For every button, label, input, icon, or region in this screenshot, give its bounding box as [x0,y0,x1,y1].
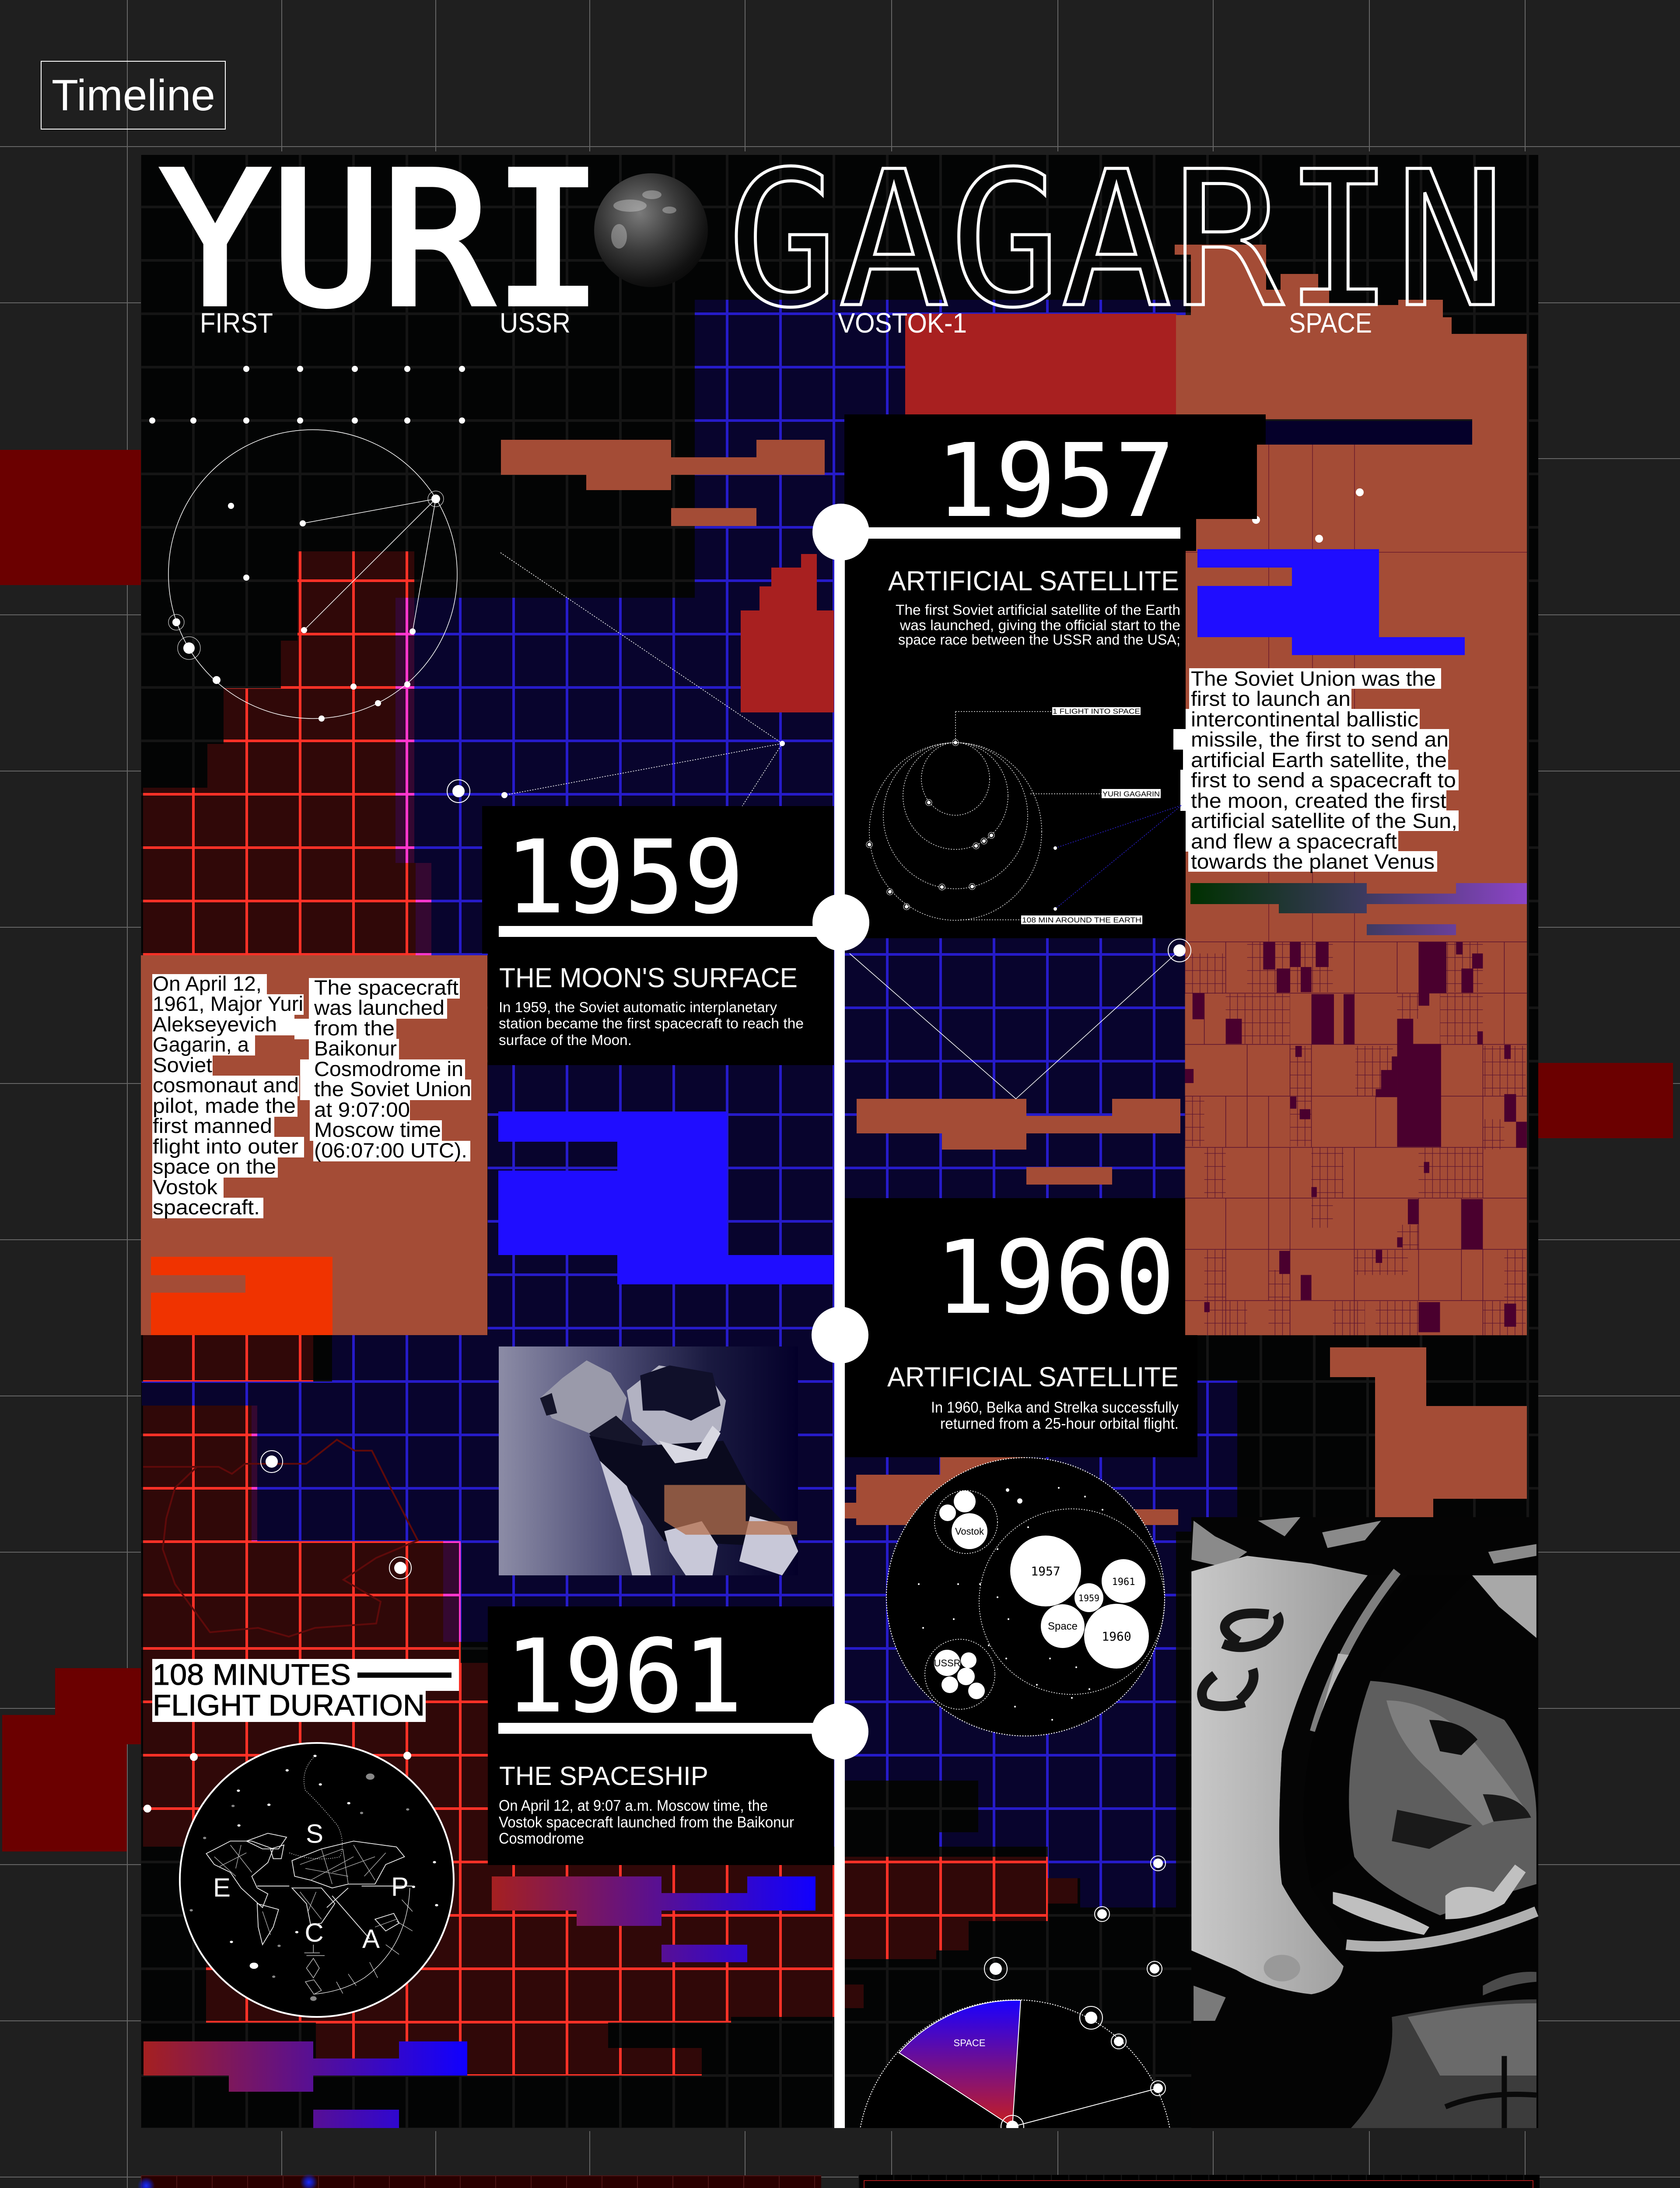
earth circle map: E [213,1873,231,1902]
panel: 1960 black block [844,1198,1197,1457]
story text left: flight into outer [153,1135,298,1158]
story text right: the Soviet Union [314,1077,471,1101]
connecting lines [500,553,1180,1099]
title labels [200,307,1372,339]
panel: path to the stars [858,2175,1540,2188]
callout: flight duration: FLIGHT DURATION [153,1689,425,1722]
treemap [1185,942,1527,1335]
brown block lower right [1330,1347,1527,1517]
timeline spine [834,526,845,2128]
story text left: cosmonaut and [153,1073,299,1097]
story text left: Vostok [153,1175,218,1199]
story text left: 1961, Major Yuri [153,992,303,1015]
callout: flight duration: 108 MINUTES [153,1658,351,1691]
blue stepped block [498,1112,834,1284]
story text right: (06:07:00 UTC). [314,1139,467,1162]
orange block [151,1257,332,1335]
heading and body 1957: The first Soviet artificial satellite of the Earth [896,602,1180,618]
heading and body 1959: surface of the Moon. [499,1032,632,1048]
blue glows [137,2174,794,2188]
dark red stepped block [741,554,834,712]
story text right: The spacecraft [314,976,458,999]
heading and body 1959: In 1959, the Soviet automatic interplanetary [499,999,777,1015]
planet icon [594,173,708,287]
panel: 1961 black block [488,1606,834,1865]
earth circle map: P [391,1872,409,1901]
heading and body 1959: station became the first spacecraft to reach the [499,1015,804,1031]
title FIRST FLIGHT [153,2177,809,2188]
heading and body 1960: ARTIFICIAL SATELLITE [887,1362,1179,1392]
story text left: space on the [153,1155,276,1178]
bubble chart: 1960 [1102,1629,1131,1644]
brown stepped block upper left [501,440,825,526]
heading and body 1957: was launched, giving the official start to the [900,617,1180,633]
story text left: first manned [153,1114,272,1137]
continents [206,1833,413,1945]
story text right: Baikonur [314,1037,397,1060]
panel: main timeline poster [141,131,1538,2188]
panel: Soviet Union text: intercontinental ballistic [1191,708,1418,731]
country outline in red zone [143,1440,418,1637]
red grid zones [143,551,1078,2076]
label: Timeline [41,61,225,129]
panel: Soviet Union text: missile, the first to send an [1191,728,1449,751]
panel: Soviet Union text: artificial satellite of the Sun, [1191,809,1457,832]
heading and body 1961 [499,1761,794,1847]
bubble chart: USSR [934,1658,961,1669]
story text right: was launched [314,996,444,1019]
callout: flight duration [152,1658,459,1722]
bubble chart: 1957 [1031,1564,1060,1578]
title box [864,2181,1533,2188]
earth circle map: C [304,1918,324,1947]
large red block [905,314,1176,414]
heading and body 1959 [499,963,804,1048]
heading and body 1961: Vostok spacecraft launched from the Baikonur [499,1814,794,1831]
label: Timeline: Timeline [52,71,215,120]
orbit diagram 1957: YURI GAGARIN [1102,790,1160,798]
heading and body 1961: On April 12, at 9:07 a.m. Moscow time, the [499,1797,768,1814]
photo: astronaut in helmet [1191,1517,1538,2130]
panel: Soviet Union text: and flew a spacecraft [1191,830,1397,853]
blue strip beside 1957 [1266,421,1472,445]
brown large block top right [1175,245,1527,1335]
bubble chart [886,1458,1165,1736]
year 1957: 1957 [936,423,1175,540]
title labels: FIRST [200,307,273,339]
bubble chart: Space [1048,1620,1078,1632]
timeline year lines and nodes [498,504,1180,1760]
panel: flight story text [141,955,487,1335]
gradient bars beneath text [1190,883,1527,935]
earth circle map [180,1743,454,2017]
story text left [153,972,303,1219]
markers [144,488,1364,1813]
story text right: Cosmodrome in [314,1057,463,1080]
title labels: SPACE [1289,307,1372,339]
background grid [141,155,1538,2128]
blue block top right [1197,549,1465,655]
story text right: Moscow time [314,1118,441,1141]
ringed markers lower right [984,1856,1166,2138]
panel: 1959 black block [482,806,834,1065]
pie diagram [858,2000,1172,2188]
panel: Soviet Union text: the moon, created the first [1191,789,1446,812]
brown stepped block near bubbles [845,1457,1178,1525]
story text left: Alekseyevich [153,1013,277,1036]
story text left: Soviet [153,1053,212,1076]
story text left: pilot, made the [153,1094,296,1117]
thin rules in brown block [1186,445,1527,942]
side red blocks [0,450,1673,1851]
heading and body 1960: In 1960, Belka and Strelka successfully [931,1399,1179,1416]
bubble chart: 1959 [1078,1593,1099,1603]
blue grid zone [142,300,1237,1907]
story text right: from the [314,1017,395,1040]
heading and body 1961: Cosmodrome [499,1830,584,1847]
white text highlights [152,974,471,1218]
title labels: USSR [500,307,570,339]
title labels: VOSTOK-1 [838,307,967,339]
title YURI: YURI [160,133,604,347]
story text right [314,976,471,1162]
gradient bars bottom left [144,2041,467,2128]
panel: Soviet Union text: first to send a spacecraft to [1191,768,1456,792]
panel: Soviet Union text: artificial Earth satellite, the [1191,748,1447,771]
year 1960: 1960 [935,1220,1175,1336]
story text left: On April 12, [153,972,262,995]
panel: Soviet Union text: towards the planet Venus [1191,850,1435,873]
orbit diagram 1957 [866,707,1182,924]
earth circle map: A [362,1924,380,1953]
story text left: Gagarin, a [153,1033,249,1056]
brown stepped block mid [857,1099,1180,1185]
panel: Soviet Union text: first to launch an [1191,687,1351,710]
heading and body 1960 [887,1362,1179,1432]
heading and body 1959: THE MOON'S SURFACE [499,963,798,993]
story text left: spacecraft. [153,1196,260,1219]
heading and body 1957: ARTIFICIAL SATELLITE [888,566,1179,596]
dark patches over blue [845,1781,978,1847]
year 1959: 1959 [505,819,744,936]
panel: 1957 black block [844,414,1266,938]
title GAGARIN: GAGARIN [727,131,1506,349]
story text right: at 9:07:00 [314,1098,410,1121]
constellation dots and circle [149,366,465,722]
heading and body 1957: space race between the USSR and the USA; [898,631,1180,648]
panel: Soviet Union text: The Soviet Union was the [1191,667,1436,690]
earth circle map: S [306,1819,323,1848]
photo: dogs Belka and Strelka [499,1346,798,1575]
orbit diagram 1957: 108 MIN AROUND THE EARTH [1022,916,1141,924]
pie diagram: SPACE [954,2037,985,2048]
panel: first flight poster [137,2174,821,2188]
gradient bars lower [492,1876,816,1962]
heading and body 1957 [888,566,1180,648]
bubble chart: 1961 [1112,1577,1135,1588]
year 1961: 1961 [505,1618,742,1735]
panel: Soviet Union text [1173,667,1459,873]
bubble chart: Vostok [955,1526,984,1537]
orbit diagram 1957: 1 FLIGHT INTO SPACE [1053,707,1140,715]
heading and body 1961: THE SPACESHIP [499,1761,708,1791]
heading and body 1960: returned from a 25-hour orbital flight. [940,1415,1179,1432]
